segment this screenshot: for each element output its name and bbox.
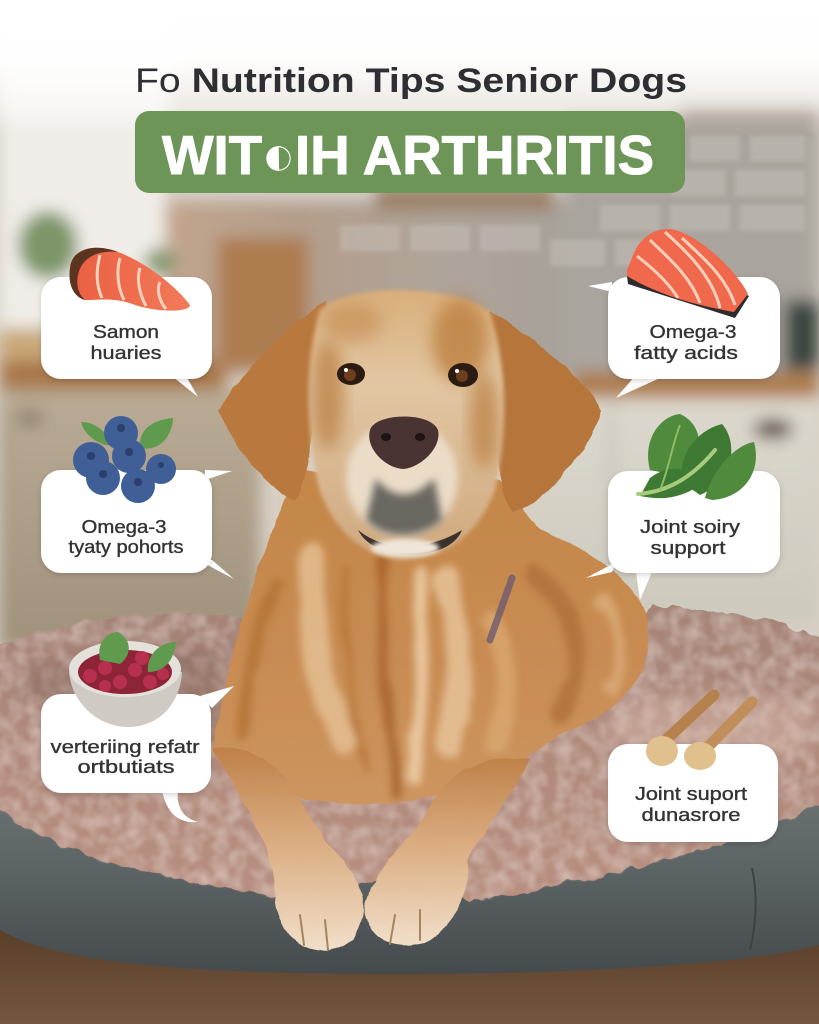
callout: omega-3 fatty potions: tyaty pohorts (68, 537, 184, 557)
front legs (213, 748, 364, 951)
callout: joint support: dunasrore (642, 805, 740, 825)
callout: joint support (608, 744, 778, 842)
title line: Fo Nutrition Tips Senior Dogs (135, 62, 687, 100)
body (213, 470, 648, 805)
icon: wooden scoops (646, 695, 752, 770)
icon: spinach leaves (638, 414, 756, 500)
callout: omega-3 fatty acids: Omega-3 (650, 322, 736, 342)
callout: vertering refatr: verteriing refatr (50, 737, 200, 757)
eyes (337, 363, 365, 385)
callout: omega-3 fatty acids: fatty acids (634, 343, 738, 363)
callout: salmon (41, 277, 212, 397)
callout: joint soiry support (586, 471, 780, 600)
head (308, 290, 504, 560)
callout: salmon: huaries (90, 343, 162, 363)
callout: omega-3 fatty potions: Omega-3 (82, 517, 166, 537)
callout: joint soiry support: Joint soiry (640, 517, 740, 537)
collar (490, 578, 512, 640)
plush top (0, 605, 819, 902)
muzzle (346, 420, 458, 536)
icon: berry bowl (69, 632, 182, 727)
title banner (135, 111, 685, 193)
golden retriever (213, 290, 648, 951)
callout: salmon: Samon (93, 322, 159, 342)
floor (0, 930, 819, 1024)
bed base (0, 780, 819, 974)
icon: salmon fillet (70, 248, 190, 311)
callout: joint soiry support: support (650, 538, 726, 558)
callout: omega-3 fatty potions (41, 470, 234, 579)
nose (369, 416, 438, 469)
callout: vertering refatr: ortbutiats (78, 757, 174, 777)
ears (218, 300, 325, 502)
icon: blueberries (73, 416, 176, 503)
callout: omega-3 fatty acids (588, 277, 780, 398)
icon: salmon steak (627, 229, 749, 318)
callout: vertering refatr (41, 686, 234, 822)
callout: joint support: Joint suport (635, 784, 747, 804)
top white fade (0, 0, 819, 135)
dog bed (0, 605, 819, 974)
title banner: WIT◐IH ARTHRITIS (162, 124, 654, 186)
